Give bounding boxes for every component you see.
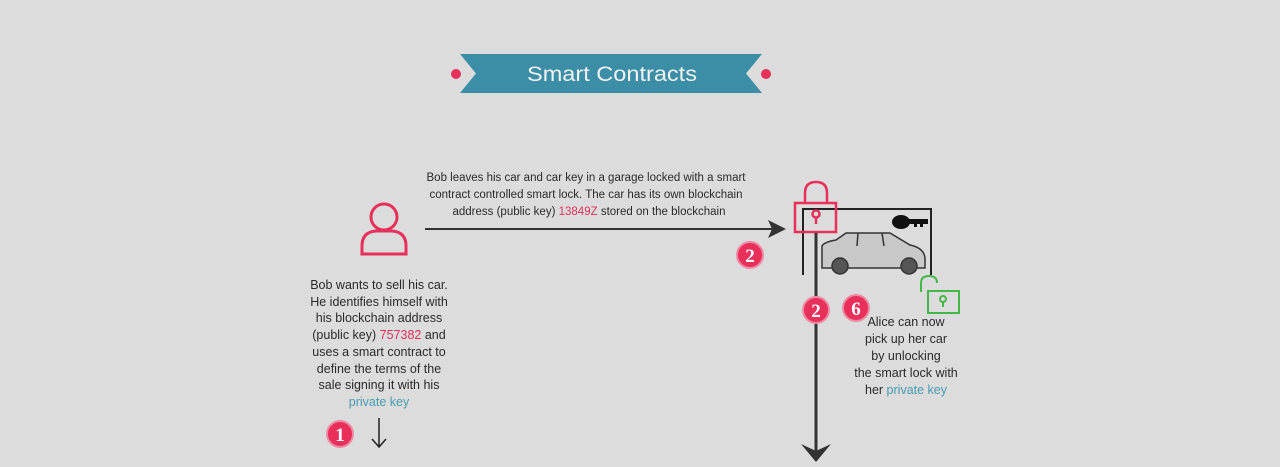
text: Bob wants to sell: uses a smart contract to — [312, 345, 446, 359]
arrow: down from garage — [801, 233, 831, 462]
badge 6 — [843, 295, 869, 321]
badge 2 — [803, 297, 829, 323]
text: Alice — [854, 315, 958, 397]
text: Bob leaves car: Bob leaves his car and car key in a garage locked with a smart — [427, 172, 746, 184]
text: Bob wants to sell: private key — [349, 395, 410, 409]
arrow: to garage — [425, 220, 786, 238]
text: Bob wants to sell: his blockchain address — [316, 311, 442, 325]
text: Bob leaves car: address (public key) 13849Z stored on the blockchain — [453, 206, 725, 218]
text: Bob wants to sell: He identifies himself with — [310, 295, 448, 309]
text: Alice: by unlocking — [871, 349, 941, 363]
text: Alice: the smart lock with — [854, 366, 958, 380]
badge 1: 1 — [335, 425, 345, 446]
badge 6: 6 — [851, 299, 861, 320]
icon: Bob person — [362, 204, 406, 254]
text: Bob wants to sell: (public key) 757382 and — [312, 328, 446, 342]
icon: red lock — [795, 182, 836, 232]
text: Bob wants to sell: define the terms of the — [317, 362, 441, 376]
title banner — [451, 54, 771, 93]
garage box — [803, 209, 931, 275]
badge 2: 2 — [811, 301, 821, 322]
badge 2 top: 2 — [745, 246, 755, 267]
text: Alice: pick up her car — [865, 332, 947, 346]
icon: car — [822, 233, 925, 274]
icon: key — [892, 215, 928, 229]
arrow: down from Bob — [372, 418, 386, 447]
text: Bob wants to sell: Bob wants to sell his car. — [310, 278, 448, 292]
title banner: Smart Contracts — [527, 63, 697, 86]
text: Alice: Alice can now — [867, 315, 946, 329]
text: Bob leaves car: contract controlled smart lock. The car has its own blockchain — [430, 189, 742, 201]
icon: green unlocked lock — [921, 276, 959, 313]
text: Bob wants to sell: sale signing it with his — [319, 378, 439, 392]
badge 1 — [327, 421, 353, 447]
text: Alice: her private key — [865, 383, 948, 397]
text: Bob leaves car — [427, 172, 746, 218]
text: Bob wants to sell — [310, 278, 448, 409]
badge 2 top — [737, 242, 763, 268]
